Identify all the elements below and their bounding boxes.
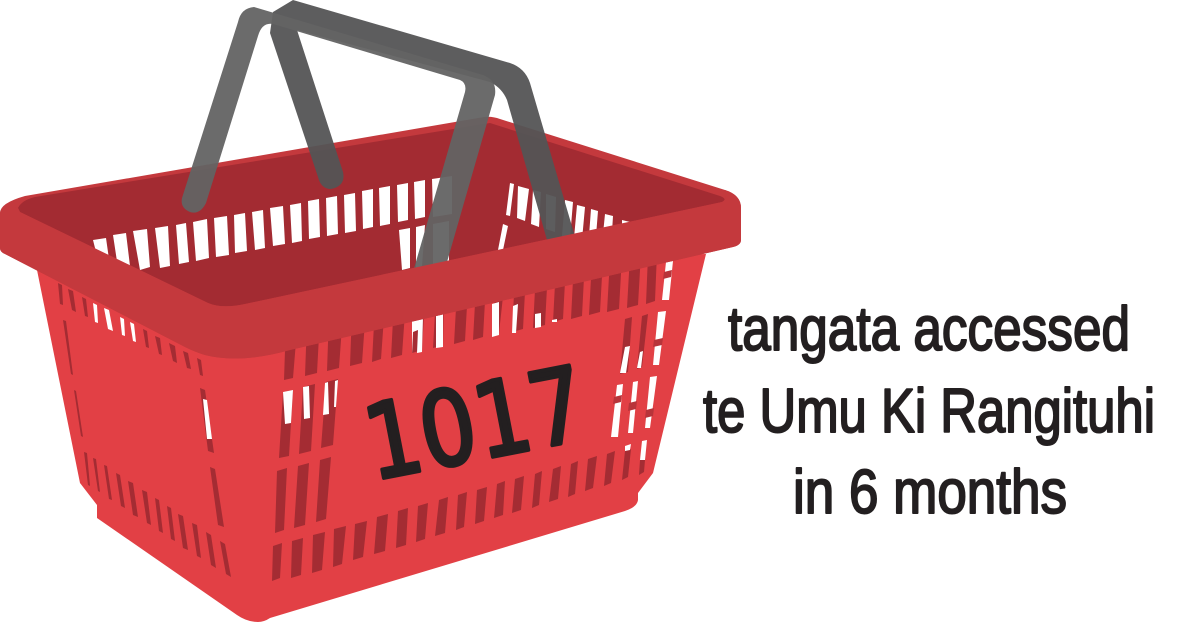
dark slots: front wall second row	[279, 314, 648, 458]
icon: shopping basket	[0, 0, 741, 622]
basket interior	[18, 123, 725, 306]
icon: back handle	[270, 0, 576, 240]
caption	[703, 295, 1155, 527]
icon: front handle	[182, 7, 495, 272]
dark slots: left wall top row	[58, 283, 203, 376]
dark slots: front wall top row	[284, 253, 657, 380]
dark slots: left wall corner lines	[63, 320, 224, 527]
red bands across right-wall openings	[613, 270, 672, 418]
count on basket: 1017: 1017	[355, 344, 596, 505]
white openings seen through front and side walls	[93, 261, 673, 460]
rim front band	[0, 190, 741, 359]
basket rim	[0, 117, 741, 359]
dark slots: front wall third row	[275, 457, 331, 533]
dark slots: left wall bottom row	[84, 452, 231, 577]
white openings in back walls	[93, 176, 630, 270]
basket body	[37, 254, 706, 622]
caption line 3: in 6 months	[793, 458, 1067, 527]
dark slots: front wall bottom row	[272, 449, 645, 581]
